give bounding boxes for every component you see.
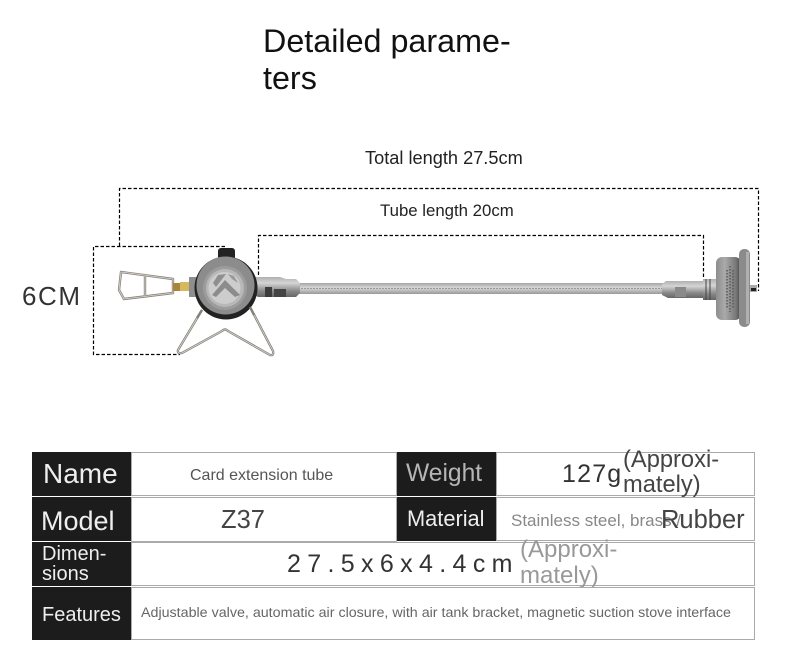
row: model value	[131, 497, 397, 542]
stand top over dial	[197, 307, 254, 318]
product diagram	[92, 188, 760, 356]
model label: Model	[41, 506, 115, 536]
name label: Name	[43, 458, 118, 489]
brass valve	[173, 277, 199, 297]
row: dimensions value: 27.5x6x4.4cm	[287, 550, 519, 578]
features label: Features	[42, 604, 121, 626]
row: material value: Stainless steel, brass /	[511, 511, 681, 530]
specification table	[32, 447, 755, 640]
row: material value: Rubber	[661, 506, 745, 534]
hose	[298, 283, 664, 294]
model label	[32, 497, 131, 541]
regulator dial	[194, 248, 258, 320]
dashed bracket: tube length	[258, 236, 704, 278]
dimensions label	[32, 542, 131, 586]
height label 6CM: 6CM	[22, 281, 82, 311]
features label	[32, 587, 131, 640]
row: name value	[131, 452, 397, 496]
row: dimensions value: mately)	[520, 562, 599, 589]
flange and pin	[739, 249, 757, 327]
material label: Material	[407, 506, 485, 531]
total length label: Total length 27.5cm	[365, 148, 523, 168]
title: ters	[263, 60, 317, 96]
row: weight value: (Approxi-	[623, 447, 719, 473]
right connector	[662, 279, 717, 300]
row: dimensions value	[131, 542, 755, 586]
row: features value	[131, 587, 755, 640]
row: features value: Adjustable valve, automatic air closure, with air tank bracket, magnetic suction stove interface	[141, 605, 731, 621]
gas holder clip	[119, 272, 173, 299]
stand wire	[178, 307, 273, 355]
weight label: Weight	[406, 460, 482, 487]
weight label	[397, 452, 496, 496]
row: weight value: 127g	[562, 460, 622, 488]
row: weight value	[496, 452, 755, 496]
dimensions label: sions	[42, 563, 89, 585]
left connector	[255, 277, 300, 297]
name label	[32, 452, 131, 496]
tube length label: Tube length 20cm	[380, 201, 514, 220]
row: dimensions value: (Approxi-	[520, 536, 617, 563]
row: weight value: mately)	[623, 472, 701, 498]
row: name value: Card extension tube	[190, 467, 333, 484]
dimensions label: Dimen-	[42, 543, 106, 565]
row: material value	[496, 497, 755, 541]
knurled cylinder fitting	[716, 257, 741, 320]
title: Detailed parame-	[263, 23, 511, 59]
dashed bracket: total length	[120, 188, 758, 291]
material label	[397, 497, 496, 541]
dashed bracket: 6CM height	[94, 246, 225, 354]
title	[263, 23, 511, 96]
row: model value: Z37	[221, 506, 265, 534]
